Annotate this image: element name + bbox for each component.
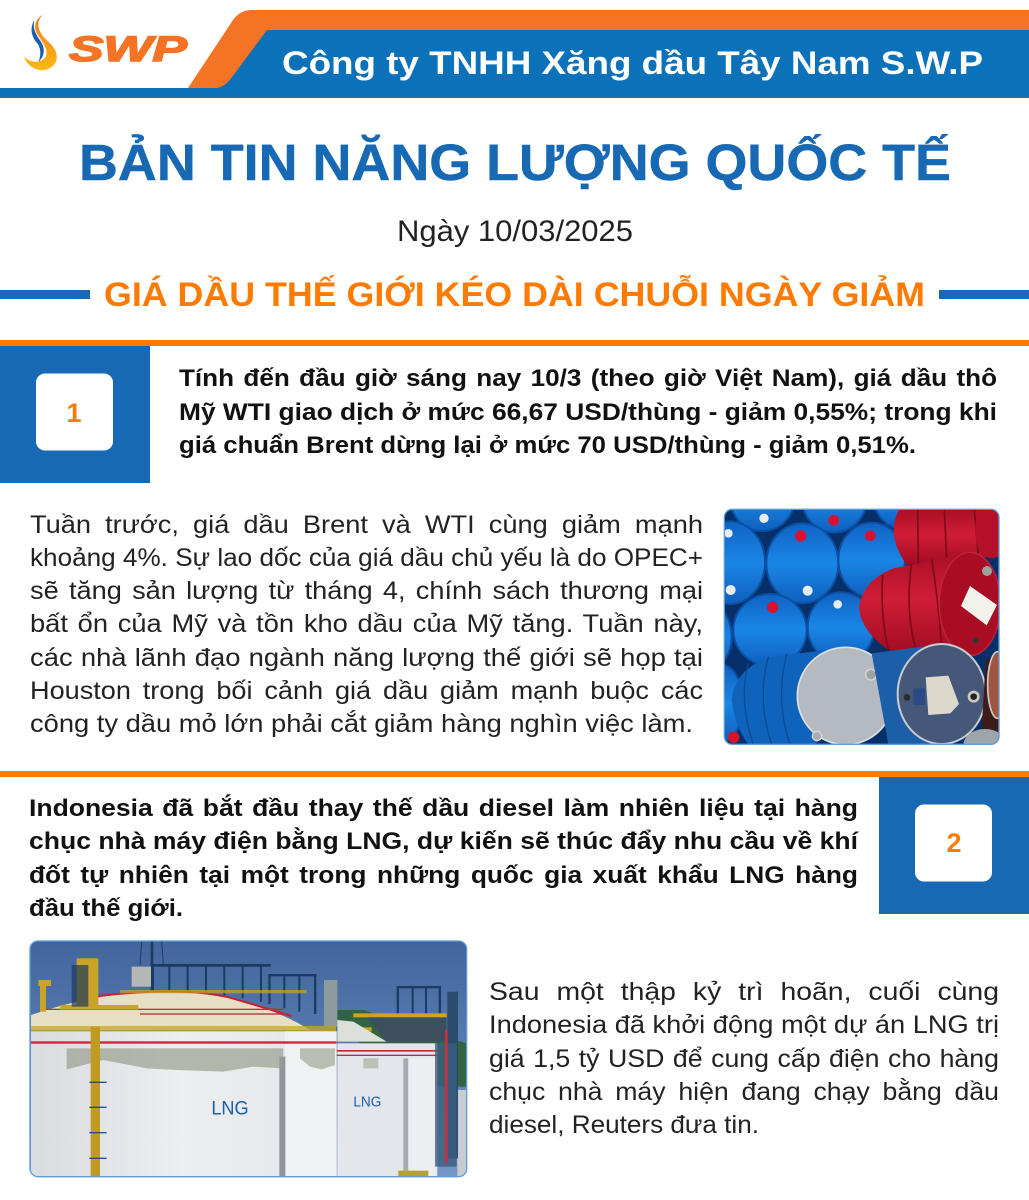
logo: SWP: SWP — [69, 30, 188, 69]
section 1 lead text — [179, 365, 997, 459]
logo: SWP — [24, 15, 188, 70]
section 1 body text: bất ổn của Mỹ và tồn kho dầu của Mỹ tăng. Tuần này, — [30, 610, 703, 638]
section 1 body text: công ty dầu mỏ lớn phải cắt giảm hàng nghìn việc làm. — [30, 709, 693, 738]
photo: oil barrels — [724, 508, 1000, 745]
section 1 body text: Houston trong bối cảnh giá dầu giảm mạnh buộc các — [30, 677, 703, 705]
section 2 number badge — [0, 771, 1029, 914]
section 2 body text: Indonesia đã khởi động một dự án LNG trị — [489, 1011, 999, 1039]
icon: flame — [24, 15, 57, 70]
section 1 number badge: 1 — [66, 398, 82, 428]
section 1 body text: sẽ tăng sản lượng từ tháng 4, chính sách thương mại — [30, 577, 703, 605]
section 1 lead text: giá chuẩn Brent dừng lại ở mức 70 USD/thùng - giảm 0,51%. — [179, 432, 916, 459]
section 1 lead text: Tính đến đầu giờ sáng nay 10/3 (theo giờ Việt Nam), giá dầu thô — [179, 365, 997, 392]
section 2 body text: diesel, Reuters đưa tin. — [489, 1111, 759, 1139]
section 2 lead text: đầu thế giới. — [29, 895, 183, 922]
section 1 number badge — [0, 340, 1029, 483]
section 2 body text: chục nhà máy hiện đang chạy bằng dầu — [489, 1077, 999, 1106]
section 2 lead text: đốt tự nhiên tại một trong những quốc gia xuất khẩu LNG hàng — [29, 862, 858, 889]
header banner — [0, 10, 1029, 98]
section 2 lead text: Indonesia đã bắt đầu thay thế dầu diesel làm nhiên liệu tại hàng — [29, 794, 858, 822]
section 1 body text — [30, 511, 703, 738]
section 2 body text: giá 1,5 tỷ USD để cung cấp điện cho hàng — [489, 1045, 999, 1073]
section 1 body text: các nhà lãnh đạo ngành năng lượng thế giới sẽ họp tại — [30, 644, 703, 672]
section 1 lead text: Mỹ WTI giao dịch ở mức 66,67 USD/thùng - giảm 0,55%; trong khi — [179, 399, 997, 426]
photo: LNG tanks: LNG — [353, 1094, 381, 1110]
section 1 body text: Tuần trước, giá dầu Brent và WTI cùng giảm mạnh — [30, 511, 703, 539]
photo: LNG tanks — [30, 941, 467, 1177]
section 2 body text: Sau một thập kỷ trì hoãn, cuối cùng — [489, 978, 999, 1006]
section 2 lead text: chục nhà máy điện bằng LNG, dự kiến sẽ thúc đẩy nhu cầu về khí — [29, 827, 859, 855]
title: BẢN TIN NĂNG LƯỢNG QUỐC TẾ — [79, 133, 951, 191]
subtitle with side bars: GIÁ DẦU THẾ GIỚI KÉO DÀI CHUỖI NGÀY GIẢM — [104, 276, 925, 314]
photo: LNG tanks: LNG — [211, 1098, 249, 1119]
section 1 body text: khoảng 4%. Sự lao dốc của giá dầu chủ yếu là do OPEC+ — [30, 544, 703, 572]
company name: Công ty TNHH Xăng dầu Tây Nam S.W.P — [282, 45, 983, 81]
section 2 lead text — [29, 794, 859, 922]
section 2 body text — [489, 978, 999, 1139]
section 2 number badge: 2 — [946, 828, 962, 858]
date: Ngày 10/03/2025 — [397, 215, 633, 248]
